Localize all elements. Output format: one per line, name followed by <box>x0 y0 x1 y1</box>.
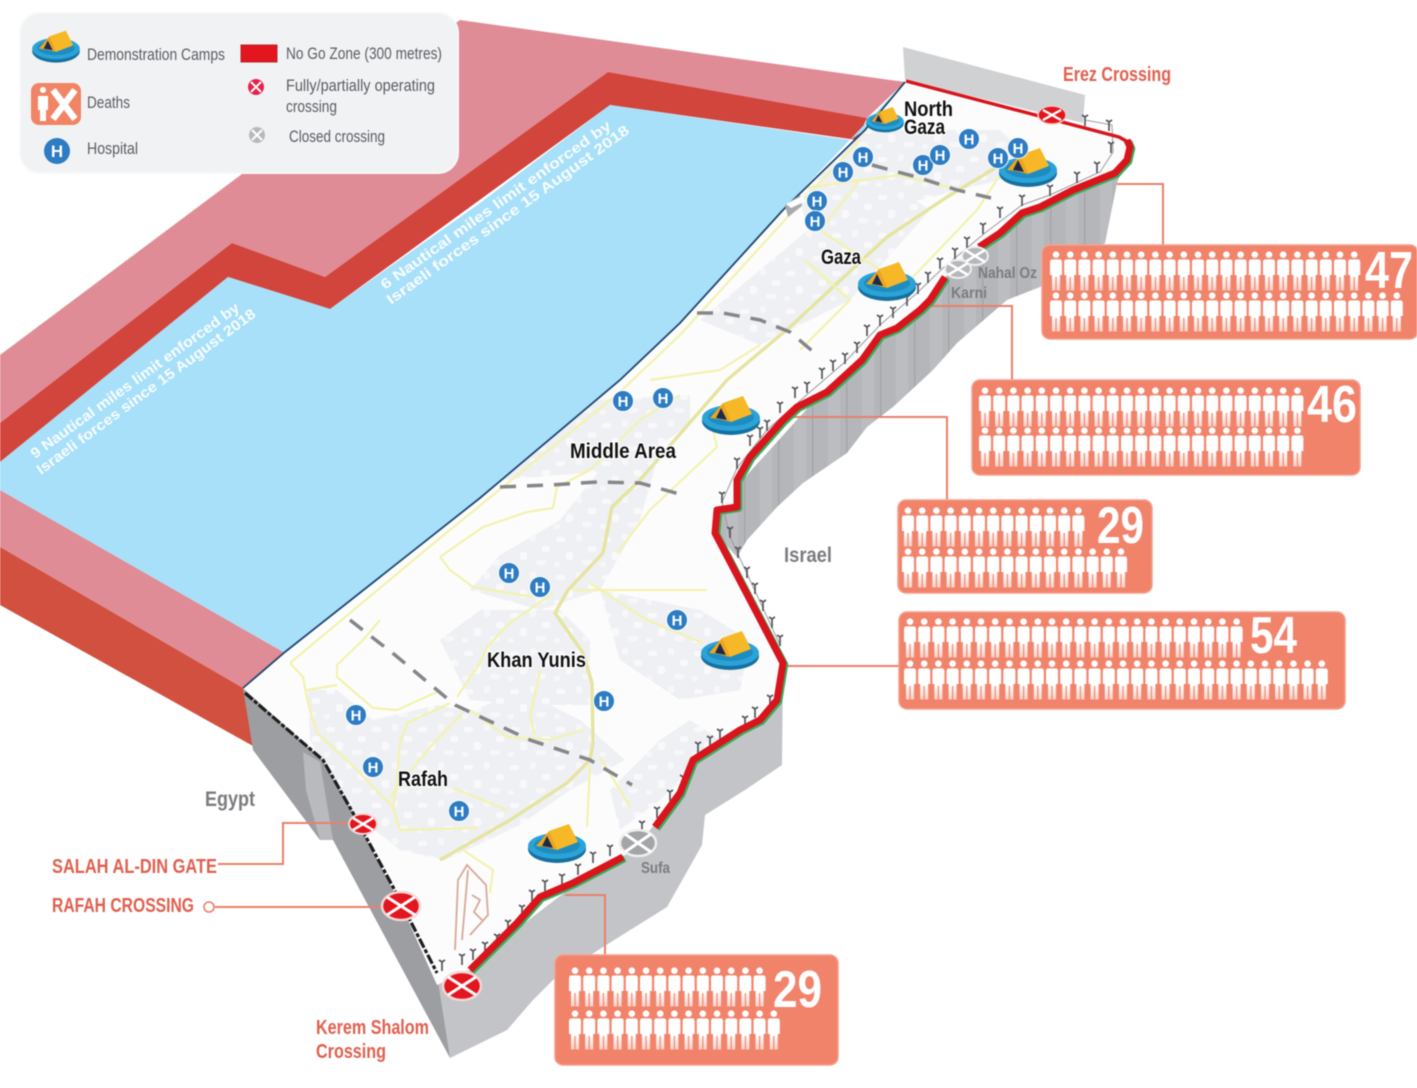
eastern wall, upper <box>715 137 1130 557</box>
land <box>243 82 1130 985</box>
crossing and country labels: Israel <box>784 544 832 567</box>
camp: North Gaza <box>866 107 904 132</box>
hospital markers: H <box>454 804 464 820</box>
pier <box>785 195 806 217</box>
legend text: operating crossing: crossing <box>286 97 337 116</box>
hospital markers: H <box>351 708 361 724</box>
area labels: North <box>904 98 953 121</box>
Egypt-side wall <box>243 688 450 1058</box>
panel: deaths 29 (Rafah): 29 <box>773 961 822 1019</box>
crossing and country labels: Egypt <box>205 788 255 811</box>
hospital markers <box>346 128 1028 822</box>
legend text: closed crossing: Closed crossing <box>289 127 385 146</box>
panel: deaths 54: 54 <box>1250 607 1297 665</box>
hospital markers: H <box>535 580 545 596</box>
crossing and country labels: SALAH AL-DIN GATE <box>52 856 217 878</box>
hospital markers: H <box>810 214 820 230</box>
legend text: operating crossing <box>286 76 435 116</box>
hospital markers: H <box>935 148 945 164</box>
legend text: camps: Demonstration Camps <box>87 45 225 64</box>
legend icon: camp <box>32 31 80 63</box>
hospital markers: H <box>838 164 848 182</box>
panel: deaths 29 (Middle Area): 29 <box>1097 497 1144 555</box>
crossing: Erez <box>1038 106 1066 124</box>
legend icon: no go zone <box>241 45 277 62</box>
upper red band <box>0 72 867 462</box>
panel: deaths 29 (Middle Area) <box>898 497 1152 593</box>
lower red band <box>0 547 253 746</box>
ruins contour <box>455 865 488 950</box>
panel: deaths 29 (Rafah) <box>555 955 838 1065</box>
crossing markers <box>349 106 1066 1000</box>
hospital markers: H <box>918 158 928 174</box>
panel: deaths 54 <box>899 607 1345 709</box>
hospital markers: H <box>858 150 868 166</box>
crossing and country labels: RAFAH CROSSING <box>52 895 194 917</box>
hospital markers: H <box>993 150 1003 168</box>
panel: legend <box>20 13 458 173</box>
no-go zone border: green fringe <box>472 142 1132 972</box>
coastline <box>243 82 905 688</box>
hospital markers: H <box>964 132 974 148</box>
crossing and country labels: Erez Crossing <box>1063 64 1171 86</box>
area labels: Gaza <box>821 246 861 269</box>
legend text: deaths: Deaths <box>87 93 130 112</box>
sea label: 9 nautical miles: Israeli forces since 15 August 2018 <box>34 306 259 478</box>
crossing: Salah al-Din <box>349 814 377 834</box>
governorate dashed lines <box>350 165 991 785</box>
crossing: Sufa (closed) <box>620 830 656 856</box>
hospital markers: H <box>812 194 822 210</box>
hospital markers: H <box>672 612 682 630</box>
hospital markers: H <box>599 694 609 710</box>
camp: Gaza north-east <box>999 148 1057 187</box>
border fence wire <box>722 120 1113 645</box>
area labels: Gaza <box>904 116 945 139</box>
crossing: Karni (closed) <box>945 260 971 278</box>
lower pink band <box>0 490 285 688</box>
camp: Khan Yunis <box>701 631 759 670</box>
camp: Gaza <box>858 262 916 301</box>
legend text: operating crossing: Fully/partially operating <box>286 76 435 95</box>
sea label: 6 nautical miles: 6 Nautical miles limit enforced by <box>378 118 614 293</box>
area labels: Khan Yunis <box>487 649 586 672</box>
crossing and country labels: Crossing <box>316 1041 386 1063</box>
legend icon: hospital <box>44 138 70 164</box>
crossing: Rafah <box>382 892 420 920</box>
sea label: 6 nautical miles <box>378 118 633 308</box>
hospital markers: H <box>1013 140 1023 158</box>
Egypt-side wall highlight <box>303 752 333 840</box>
area labels <box>398 98 953 791</box>
eastern wall, lower <box>437 663 783 1058</box>
roads <box>290 140 1000 893</box>
crossing and country labels: Karni <box>951 285 987 302</box>
legend text: hospital: Hospital <box>87 139 138 158</box>
panel: deaths 47 <box>1042 242 1417 339</box>
demonstration camps <box>528 107 1057 863</box>
area labels: Middle Area <box>570 440 676 463</box>
legend icon: deaths <box>31 83 81 125</box>
crossing and country labels: Nahal Oz <box>978 265 1037 282</box>
crossing and country labels: Sufa <box>641 860 670 877</box>
hospital markers: H <box>618 394 628 410</box>
crossing: Nahal Oz (closed) <box>962 247 988 265</box>
panel: deaths 46 <box>972 376 1360 475</box>
camp: Middle Area <box>702 396 760 435</box>
hospital markers: H <box>658 390 668 408</box>
panel: grey walls <box>243 47 1130 1058</box>
panel: Gaza Strip land map <box>243 81 1132 985</box>
hospital markers: H <box>368 760 378 776</box>
area labels: Rafah <box>398 768 448 791</box>
crossing and country labels: Kerem Shalom <box>316 1017 429 1039</box>
panel: deaths 46: 46 <box>1307 376 1357 434</box>
panel: connectors <box>204 184 1163 956</box>
Egypt border <box>245 693 437 973</box>
panel: sea limits and no-go bands <box>0 20 905 746</box>
crossing: Kerem Shalom <box>443 972 481 1000</box>
border fence posts <box>439 115 1114 971</box>
sea label: 6 nautical miles: Israeli forces since 15 August 2018 <box>384 123 633 308</box>
legend icon: hospital: H <box>51 142 63 161</box>
camp: Rafah <box>528 824 586 863</box>
urban areas <box>308 130 1040 860</box>
legend icon: closed crossing <box>249 127 265 143</box>
legend icon: operating crossing <box>248 79 264 95</box>
sea <box>0 82 905 653</box>
northern fence wall <box>903 47 1085 123</box>
upper pink band <box>0 20 905 423</box>
hospital markers: H <box>504 566 514 582</box>
crossing and country labels <box>52 64 1171 1063</box>
no-go zone border: red <box>470 81 1130 970</box>
sea label: 9 nautical miles: 9 Nautical miles limit enforced by <box>28 300 243 462</box>
legend text: no go zone: No Go Zone (300 metres) <box>286 44 442 63</box>
